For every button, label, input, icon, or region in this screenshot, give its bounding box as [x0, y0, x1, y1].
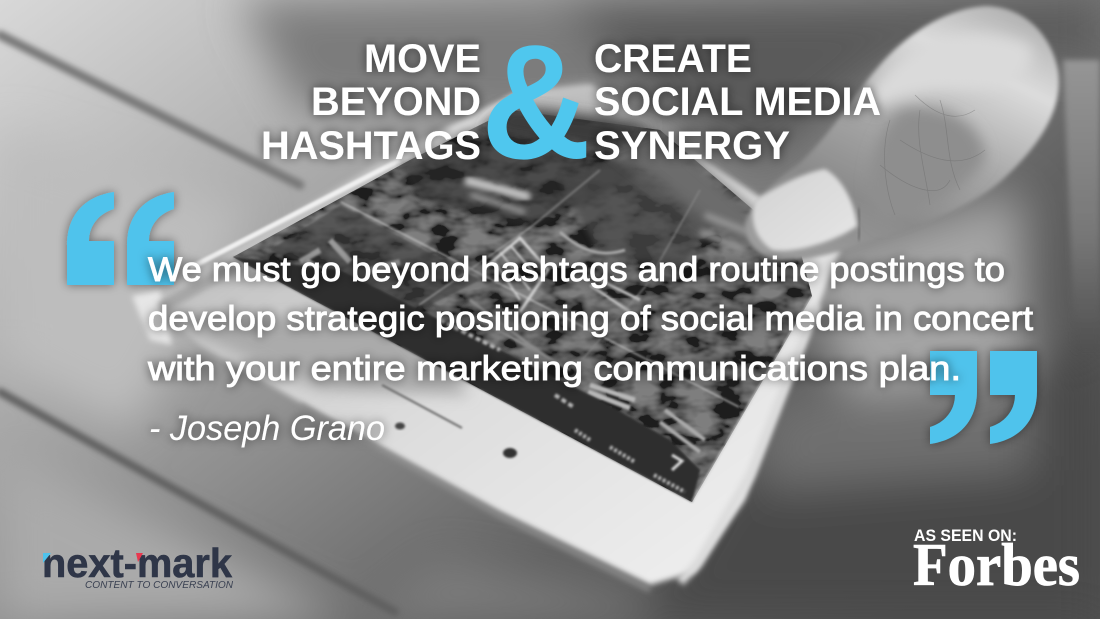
screen toolbar row	[233, 257, 700, 502]
next-mark logo: next-mark	[42, 540, 232, 586]
heading: left column: MOVE	[364, 37, 481, 81]
phone body	[132, 85, 840, 590]
quote text: with your entire marketing communications plan.	[147, 350, 961, 388]
right quotation mark	[930, 351, 1037, 444]
heading: right column: SOCIAL MEDIA	[594, 80, 881, 124]
thumb	[745, 6, 1059, 260]
heading: left column: HASHTAGS	[261, 124, 481, 168]
quote attribution: - Joseph Grano	[149, 409, 385, 448]
quote text: We must go beyond hashtags and routine postings to	[148, 251, 1005, 289]
heading: ampersand: &	[481, 10, 591, 193]
quote text	[147, 251, 1033, 388]
Forbes badge: AS SEEN ON:	[914, 526, 1017, 545]
heading: left column	[261, 37, 481, 168]
heading: right column: SYNERGY	[594, 124, 790, 168]
Forbes badge: Forbes	[913, 532, 1080, 598]
phone screen	[233, 110, 812, 502]
next-mark logo: CONTENT TO CONVERSATION	[85, 580, 234, 591]
speaker and home dots	[382, 385, 462, 428]
heading: right column: CREATE	[594, 37, 752, 81]
quote text: develop strategic positioning of social media in concert	[148, 300, 1033, 338]
left quotation mark	[67, 192, 174, 285]
heading: left column: BEYOND	[311, 80, 481, 124]
heading: right column	[594, 37, 881, 168]
